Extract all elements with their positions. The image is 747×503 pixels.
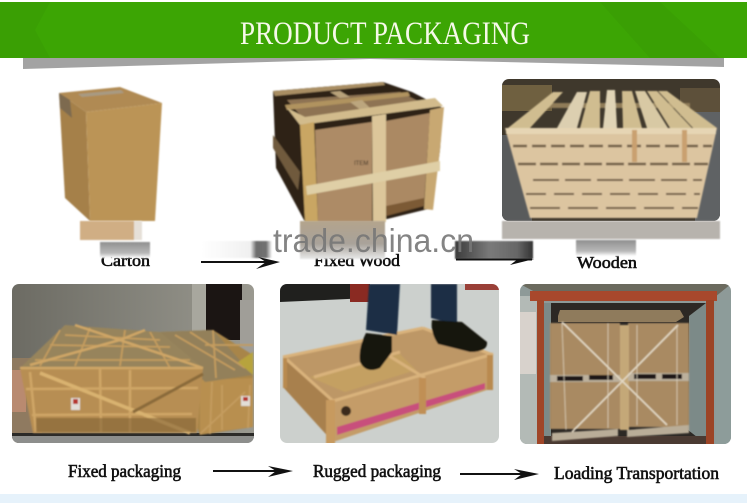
legs <box>366 284 400 335</box>
photo: rugged packaging <box>280 284 499 444</box>
first crate <box>20 325 203 368</box>
label: Carton: Carton <box>101 251 151 270</box>
pallet top slats <box>508 90 717 128</box>
title: PRODUCT PACKAGING <box>240 16 530 52</box>
crate <box>284 362 330 434</box>
watermark: trade.china.cn <box>273 222 474 259</box>
arrow: fixed to rugged <box>213 466 293 477</box>
photo: fixed packaging <box>12 284 254 443</box>
photo: wooden pallet stack <box>502 79 720 221</box>
header banner <box>0 2 747 69</box>
second crate <box>196 330 254 436</box>
pallet front boards <box>505 128 717 218</box>
photo: fixed wood crate: ITEM <box>354 161 368 167</box>
photo: fixed wood crate <box>273 82 444 222</box>
photo: loading transportation <box>520 284 731 444</box>
label: Wooden: Wooden <box>577 253 638 272</box>
arrow: fixed wood to wooden <box>456 258 534 265</box>
label: Fixed Wood: Fixed Wood <box>314 251 401 270</box>
label: Loading Transportation: Loading Transportation <box>554 463 719 483</box>
arrow: carton to fixed wood <box>201 257 280 269</box>
label: Rugged packaging: Rugged packaging <box>313 461 441 481</box>
photo: carton box <box>59 87 162 221</box>
bottom strip <box>0 494 747 503</box>
label: Fixed packaging: Fixed packaging <box>68 461 181 481</box>
shoes <box>360 333 392 370</box>
arrow: rugged to loading <box>460 469 539 480</box>
blurred watermark residue strips <box>80 221 720 259</box>
